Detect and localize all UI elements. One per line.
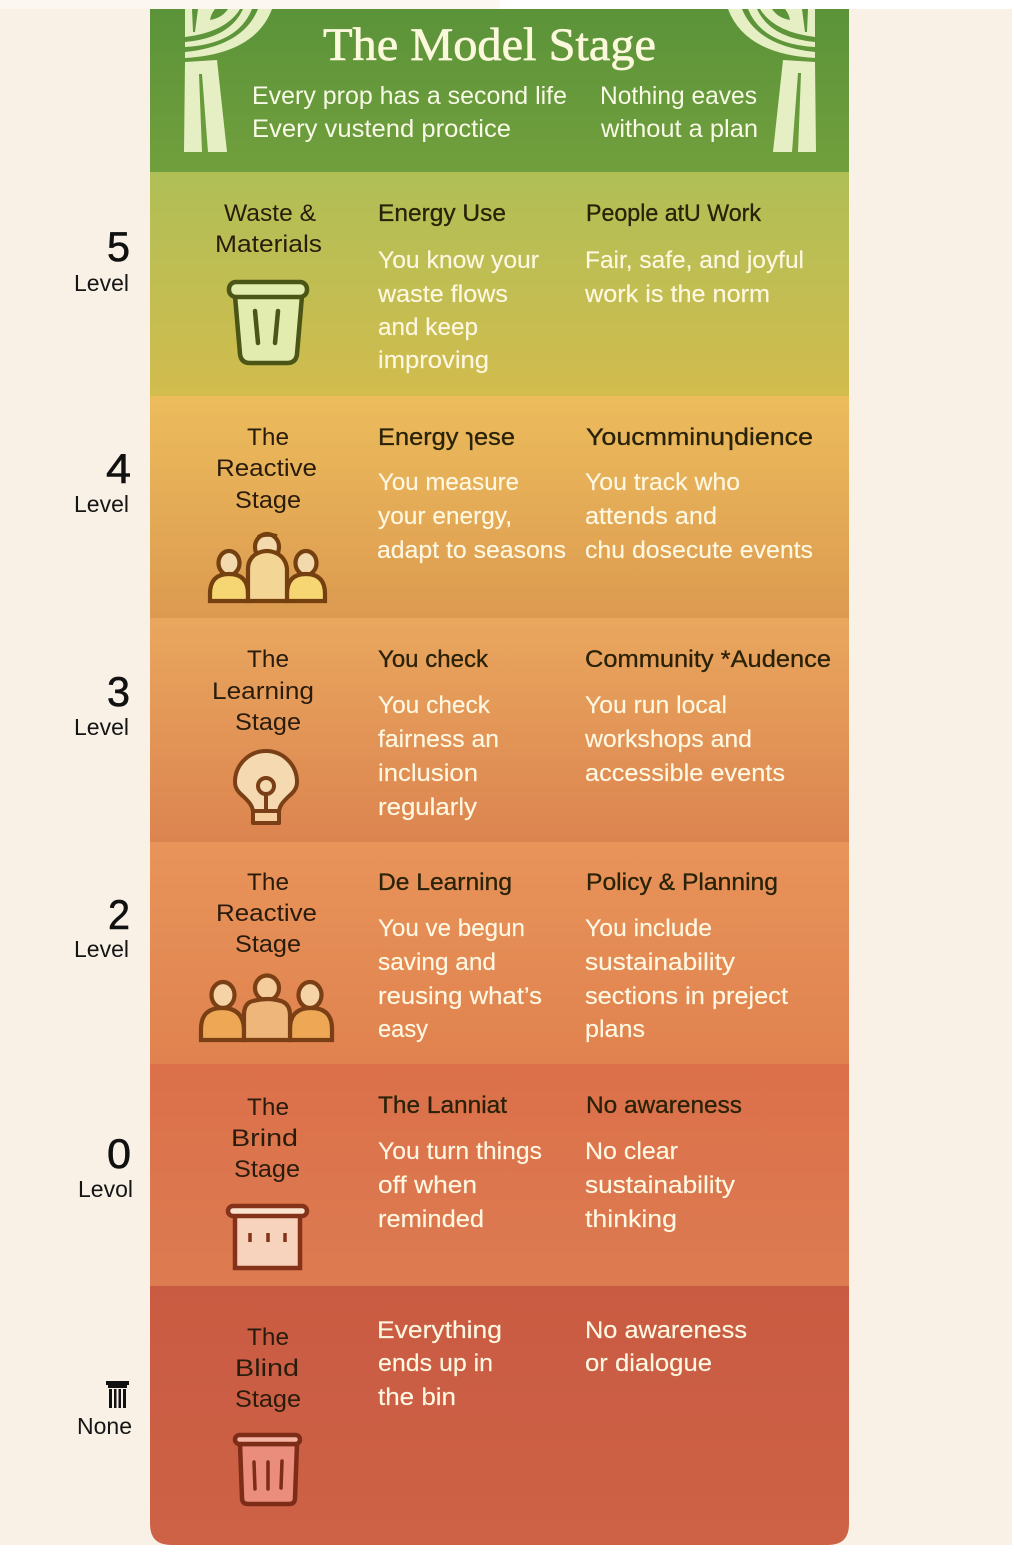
column: audience: Youcmminuɿdience <box>586 424 813 451</box>
column: audience: attends and <box>585 503 717 530</box>
column: the lanniat: The Lanniat <box>378 1092 507 1119</box>
level 0 label: Levol <box>78 1176 133 1202</box>
column: no awareness: No awareness <box>586 1092 742 1119</box>
column: energy use: You know your <box>378 247 539 274</box>
column: energy use: You measure <box>378 469 519 496</box>
column: no awareness: thinking <box>585 1206 677 1233</box>
icon: group of people <box>201 976 332 1040</box>
column: policy and planning: You include <box>585 915 712 942</box>
column: the lanniat <box>378 1092 542 1233</box>
stage name: The <box>247 1324 289 1351</box>
column: you check: You check <box>378 646 489 673</box>
column: audience: chu dosecute events <box>585 537 813 564</box>
level 2 label: 2 <box>108 891 130 938</box>
stage name: The <box>247 1094 289 1121</box>
column: de learning: reusing what’s <box>378 983 542 1010</box>
column: people at work <box>584 200 804 308</box>
stage name: The <box>247 646 289 673</box>
icon: audience <box>210 534 325 601</box>
panel: header <box>150 9 849 172</box>
column: everything: the bin <box>378 1384 456 1411</box>
stage name: The <box>247 869 289 896</box>
column: policy and planning: Policy & Planning <box>586 869 778 896</box>
column: no awareness: or dialogue <box>585 1350 712 1377</box>
panel: level 3 <box>74 618 849 842</box>
column: no awareness <box>585 1092 742 1233</box>
stage name <box>231 1094 300 1183</box>
stage name: Stage <box>235 709 301 736</box>
icon: rubbish bin <box>235 1435 300 1504</box>
level 2 label <box>74 891 130 962</box>
panel: level 0 <box>78 1064 849 1286</box>
stage name: Blind <box>235 1355 299 1382</box>
column: everything: ends up in <box>378 1350 493 1377</box>
level 5 label: 5 <box>107 223 130 270</box>
column: no awareness: No clear <box>585 1138 678 1165</box>
none level label <box>77 1381 132 1439</box>
stage name <box>216 869 317 958</box>
stage name: Brind <box>231 1125 298 1152</box>
stage name: Stage <box>235 1386 301 1413</box>
stage name <box>235 1324 301 1413</box>
column: energy use: Energy ɿese <box>378 424 515 451</box>
stage name: Stage <box>234 1156 300 1183</box>
column: policy and planning: sustainability <box>585 949 736 976</box>
column: energy use: improving <box>378 347 489 374</box>
header tagline right: without a plan <box>600 115 758 143</box>
column: no awareness <box>585 1317 747 1377</box>
column: community audience: workshops and <box>584 726 752 753</box>
column: you check: inclusion <box>378 760 478 787</box>
icon: left curtain <box>184 9 272 152</box>
level 0 label <box>78 1130 133 1202</box>
stage name: Stage <box>235 931 301 958</box>
none level label: None <box>77 1413 132 1439</box>
column: no awareness: No awareness <box>585 1317 747 1344</box>
column: people at work: work is the norm <box>584 281 770 308</box>
column: de learning: saving and <box>378 949 496 976</box>
panel: none level <box>77 1286 849 1545</box>
column: people at work: People atU Work <box>586 200 762 227</box>
column: policy and planning <box>585 869 788 1043</box>
column: no awareness: sustainability <box>585 1172 736 1199</box>
column: community audience <box>584 646 831 787</box>
stage name: Learning <box>212 678 314 705</box>
column: energy use: Energy Use <box>378 200 506 227</box>
icon: light bulb <box>235 751 297 823</box>
stage name <box>212 646 314 736</box>
column: the lanniat: reminded <box>378 1206 484 1233</box>
column: policy and planning: sections in preject <box>585 983 788 1010</box>
stage name: Materials <box>215 231 322 258</box>
stage name: The <box>247 424 289 451</box>
column: you check: fairness an <box>378 726 499 753</box>
column: everything: Everything <box>377 1317 502 1344</box>
stage name <box>215 200 322 258</box>
column: audience <box>585 424 813 564</box>
level 5 label <box>74 223 130 296</box>
column: the lanniat: You turn things <box>378 1138 542 1165</box>
icon: right curtain <box>728 9 816 152</box>
panel: level 2 <box>74 842 849 1064</box>
stage name: Reactive <box>216 900 317 927</box>
header tagline left: Every prop has a second life <box>252 82 567 110</box>
column: de learning: You ve begun <box>378 915 525 942</box>
header tagline right: Nothing eaves <box>600 82 757 110</box>
panel: level 4 <box>74 396 849 618</box>
column: community audience: You run local <box>585 692 727 719</box>
header tagline left: Every vustend proctice <box>252 115 511 143</box>
column: energy use: adapt to seasons <box>377 537 566 564</box>
column: community audience: Community *Audence <box>585 646 831 673</box>
title: The Model Stage <box>323 19 656 71</box>
column: you check: regularly <box>378 794 478 821</box>
stage name: Reactive <box>216 455 317 482</box>
column: energy use: your energy, <box>378 503 512 530</box>
column: you check: You check <box>378 692 491 719</box>
icon: closed box <box>228 1206 307 1268</box>
column: de learning: De Learning <box>378 869 512 896</box>
icon: recycling bin <box>229 282 307 363</box>
column: de learning <box>378 869 542 1043</box>
column: energy use <box>377 200 539 374</box>
level 2 label: Level <box>74 936 129 962</box>
icon: pillar <box>106 1381 129 1408</box>
column: the lanniat: off when <box>378 1172 477 1199</box>
column: energy use: and keep <box>378 314 478 341</box>
column: de learning: easy <box>378 1016 429 1043</box>
stage name <box>216 424 317 514</box>
panel: level 5 <box>74 172 849 396</box>
column: everything <box>377 1317 502 1411</box>
column: you check <box>378 646 499 821</box>
level 0 label: 0 <box>107 1130 131 1177</box>
header tagline left <box>252 82 567 143</box>
level 3 label: 3 <box>107 668 130 715</box>
level 3 label <box>74 668 130 740</box>
header tagline right <box>600 82 758 143</box>
level 4 label: Level <box>74 491 129 517</box>
column: audience: You track who <box>585 469 740 496</box>
level 3 label: Level <box>74 714 129 740</box>
level 4 label <box>74 445 131 517</box>
stage name: Stage <box>235 487 301 514</box>
column: energy use <box>377 424 566 564</box>
column: community audience: accessible events <box>585 760 785 787</box>
level 5 label: Level <box>74 270 129 296</box>
column: policy and planning: plans <box>585 1016 645 1043</box>
column: people at work: Fair, safe, and joyful <box>585 247 804 274</box>
column: energy use: waste flows <box>377 281 508 308</box>
level 4 label: 4 <box>106 445 131 492</box>
stage name: Waste & <box>224 200 316 227</box>
